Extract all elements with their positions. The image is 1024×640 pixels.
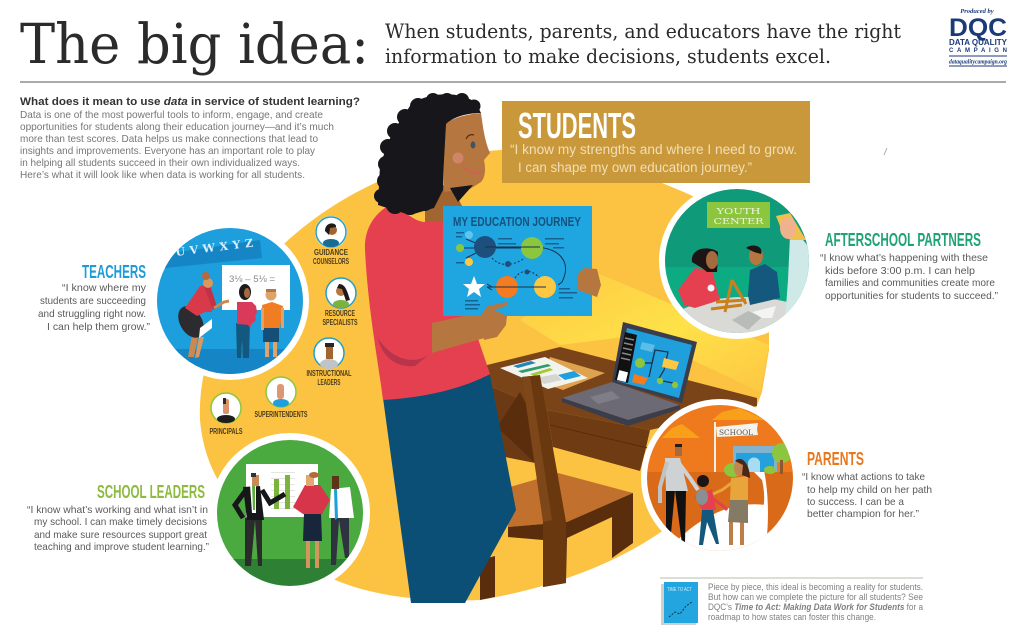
small circle: instructional leaders: LEADERS — [318, 378, 341, 387]
chair — [480, 375, 633, 600]
seated boy — [746, 246, 780, 305]
man with blue tie — [329, 476, 354, 565]
laptop — [562, 322, 697, 426]
face — [444, 113, 490, 192]
teachers text — [38, 262, 150, 333]
banner letters: U V W X Y Z — [175, 237, 254, 259]
father — [660, 444, 698, 544]
footer callout: roadmap to how states can foster this change. — [708, 612, 876, 622]
school leaders text: teaching and improve student learning.” — [34, 541, 209, 553]
man with suit — [235, 473, 285, 566]
panel: school leaders circle — [210, 433, 370, 593]
school leaders text: SCHOOL LEADERS — [97, 482, 205, 502]
parents text: PARENTS — [807, 449, 864, 469]
logo: Data Quality Campaign: Produced by — [960, 8, 994, 15]
student two — [261, 289, 284, 357]
poster: my education journey: MY EDUCATION JOURNEY — [453, 214, 581, 229]
small circle: resource specialists: RESOURCE — [325, 309, 355, 318]
whiteboard — [222, 265, 290, 310]
parents text: to success. I can be a — [807, 496, 904, 508]
neck — [425, 182, 462, 222]
logo: Data Quality Campaign — [949, 8, 1007, 66]
intro text block: insights and improvements. Everyone has an important role to play — [20, 145, 316, 157]
standing woman — [776, 213, 809, 314]
subtitle: information to make decisions, students excel. — [385, 44, 831, 68]
intro text block: Data is one of the most powerful tools to inform, engage, and create — [20, 109, 323, 121]
panel: afterschool circle — [659, 189, 809, 339]
teachers text: I can help them grow.” — [47, 321, 150, 333]
title: The big idea: — [20, 12, 369, 76]
intro text block: What does it mean to use data in service of student learning? — [20, 96, 360, 108]
parents text: better champion for her.” — [807, 508, 919, 520]
hair — [374, 93, 481, 215]
school flag: SCHOOL — [719, 429, 753, 437]
school leaders text: my school. I can make timely decisions — [34, 516, 207, 528]
logo: Data Quality Campaign: CAMPAIGN — [949, 48, 1007, 54]
small circle: instructional leaders: INSTRUCTIONAL — [306, 369, 352, 378]
afterschool text: families and communities create more — [825, 277, 995, 289]
youth center sign: YOUTH — [715, 207, 761, 216]
pointing hand — [480, 302, 508, 340]
intro text block: in helping all students succeed in their own individualized ways. — [20, 157, 300, 169]
intro text block — [20, 96, 360, 181]
clouds — [662, 424, 700, 438]
mother — [713, 459, 750, 545]
small circle: principals — [210, 393, 243, 436]
afterschool text: kids before 3:00 p.m. I can help — [825, 265, 975, 277]
youth center sign: CENTER — [714, 217, 765, 226]
woman in red — [293, 472, 330, 568]
parents text — [802, 449, 932, 520]
footer callout: DQC’s Time to Act: Making Data Work for Students for a — [708, 602, 923, 612]
intro text block: more than test scores. Data helps us make connections that lead to — [20, 133, 318, 145]
small circle: resource specialists — [322, 278, 358, 327]
panel: parents circle — [641, 399, 793, 551]
woman student — [365, 93, 601, 603]
forearm — [432, 312, 495, 353]
small circle: superintendents: SUPERINTENDENTS — [254, 410, 308, 419]
school leaders text: and make sure resources support great — [34, 529, 207, 541]
school building — [724, 443, 792, 477]
poster: my education journey — [443, 206, 592, 316]
logo: Data Quality Campaign: dataqualitycampaign.org — [949, 60, 1007, 66]
students panel: “I know my strengths and where I need to grow. — [510, 142, 797, 157]
small circle: guidance counselors — [313, 216, 349, 266]
trousers — [383, 375, 516, 603]
panel: teachers circle: 3⅛ – 5⅛ = — [229, 274, 275, 284]
child — [695, 475, 727, 545]
parents text: “I know what actions to take — [802, 471, 925, 483]
desk — [487, 347, 757, 471]
wooden model — [711, 280, 746, 312]
logo: Data Quality Campaign: DQC — [949, 14, 1007, 42]
footer callout — [660, 577, 923, 625]
teachers text: and struggling right now. — [38, 308, 146, 320]
teacher — [173, 272, 229, 358]
subtitle: When students, parents, and educators have the right — [385, 19, 901, 43]
small circle: resource specialists: SPECIALISTS — [322, 318, 358, 327]
small circle: instructional leaders — [306, 338, 352, 387]
teachers text: students are succeeding — [40, 295, 146, 307]
school leaders text: “I know what’s working and what isn’t in — [27, 504, 208, 516]
afterschool text — [820, 230, 998, 302]
small circle: guidance counselors: COUNSELORS — [313, 257, 349, 266]
holding hand — [577, 268, 601, 297]
parents text: to help my child on her path — [807, 484, 932, 496]
yellow background blob — [200, 150, 769, 600]
afterschool text: “I know what’s happening with these — [820, 252, 988, 264]
student one — [236, 284, 257, 358]
report cover: TIME TO ACT — [667, 587, 692, 593]
panel: teachers circle — [150, 220, 310, 380]
logo: Data Quality Campaign: DATA QUALITY — [949, 37, 1007, 47]
school flag — [714, 422, 758, 472]
chart board — [246, 464, 318, 517]
teachers text: TEACHERS — [82, 262, 146, 282]
tablet on table — [732, 311, 762, 330]
teachers text: “I know where my — [62, 282, 147, 294]
students panel — [502, 101, 810, 183]
seated girl — [678, 248, 720, 308]
small circle: superintendents — [254, 377, 308, 419]
shirt — [365, 200, 490, 400]
intro text block: opportunities for students along their education journey—and it’s much — [20, 121, 334, 133]
school leaders text — [27, 482, 209, 553]
intro text block: Here’s what it will look like when data is working for all students. — [20, 169, 305, 181]
students panel: I can shape my own education journey.” — [518, 160, 752, 175]
light glow behind laptop — [520, 270, 769, 392]
report cover — [661, 582, 698, 625]
star — [463, 276, 485, 297]
youth center sign — [707, 202, 770, 228]
footer callout: But how can we complete the picture for all students? See — [708, 592, 923, 602]
small circle: guidance counselors: GUIDANCE — [314, 248, 349, 257]
footer callout: Piece by piece, this ideal is becoming a reality for students. — [708, 582, 923, 592]
afterschool text: opportunities for students to succeed.” — [825, 290, 998, 302]
paper on desk — [500, 357, 588, 389]
subtitle — [385, 19, 901, 68]
students panel: STUDENTS — [518, 105, 636, 146]
small circle: principals: PRINCIPALS — [210, 427, 243, 436]
